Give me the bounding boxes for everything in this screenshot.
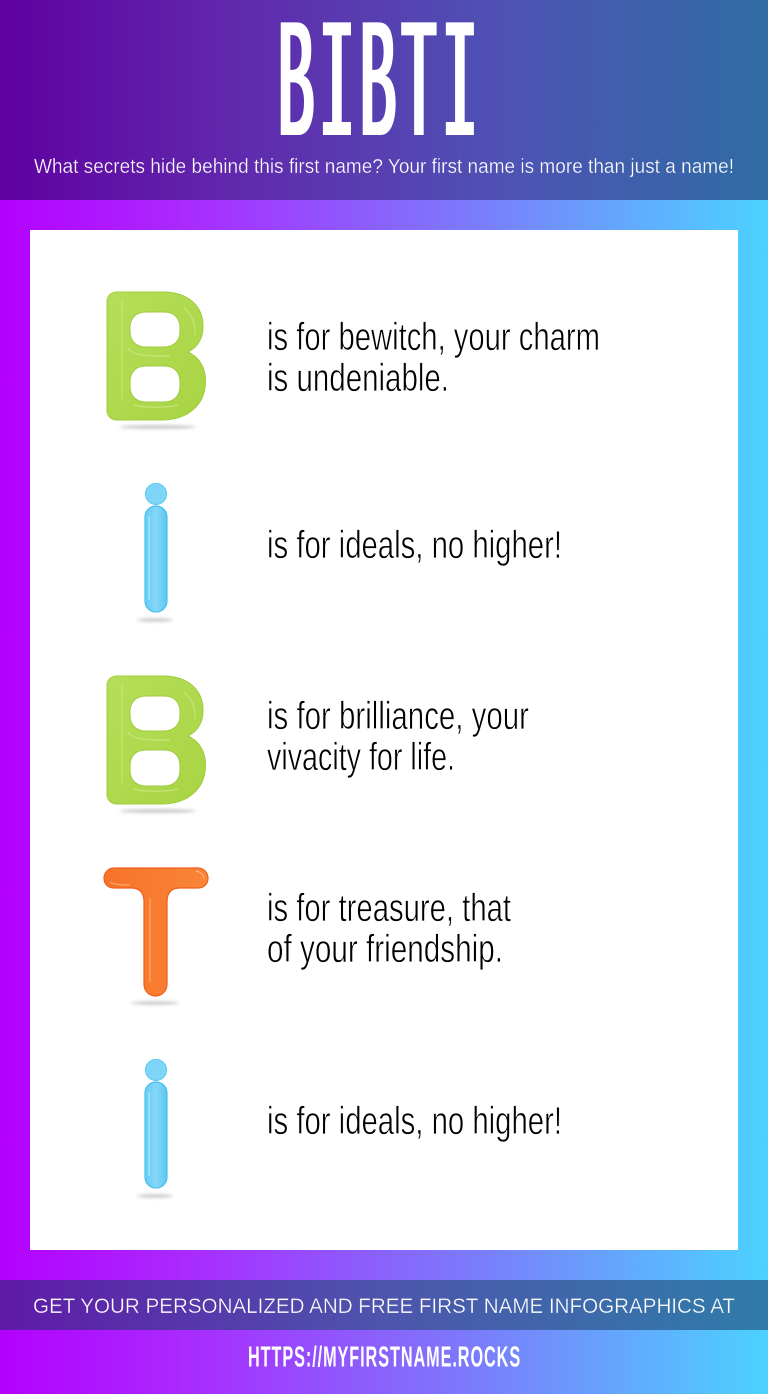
text: T treasure: is for treasure, that	[267, 887, 511, 930]
text: B bewitch: is undeniable.	[267, 357, 449, 400]
text: B bewitch: is for bewitch, your charm	[267, 316, 600, 359]
white content panel	[30, 230, 738, 1250]
footer call to action band	[0, 1280, 768, 1330]
icon: letter i blue	[137, 484, 173, 622]
icon: letter T orange	[104, 868, 208, 1005]
footer url: HTTPS://MYFIRSTNAME.ROCKS	[248, 1341, 520, 1373]
text: i ideals second: is for ideals, no higher!	[267, 1100, 562, 1143]
text: B brilliance: vivacity for life.	[267, 736, 455, 779]
text: B brilliance: is for brilliance, your	[267, 695, 529, 738]
text: T treasure	[267, 887, 511, 971]
header band	[0, 0, 768, 200]
subtitle: What secrets hide behind this first name? Your first name is more than just a name!	[34, 156, 734, 178]
footer call to action band: GET YOUR PERSONALIZED AND FREE FIRST NAME INFOGRAPHICS AT	[33, 1295, 735, 1318]
text: B brilliance	[267, 695, 529, 779]
text: T treasure: of your friendship.	[267, 928, 503, 971]
icon: letter B green second	[107, 676, 206, 813]
text: B bewitch	[267, 316, 600, 400]
text: i ideals: is for ideals, no higher!	[267, 524, 562, 567]
icon: letter B green	[107, 292, 206, 429]
icon: letter i blue second	[137, 1060, 173, 1198]
